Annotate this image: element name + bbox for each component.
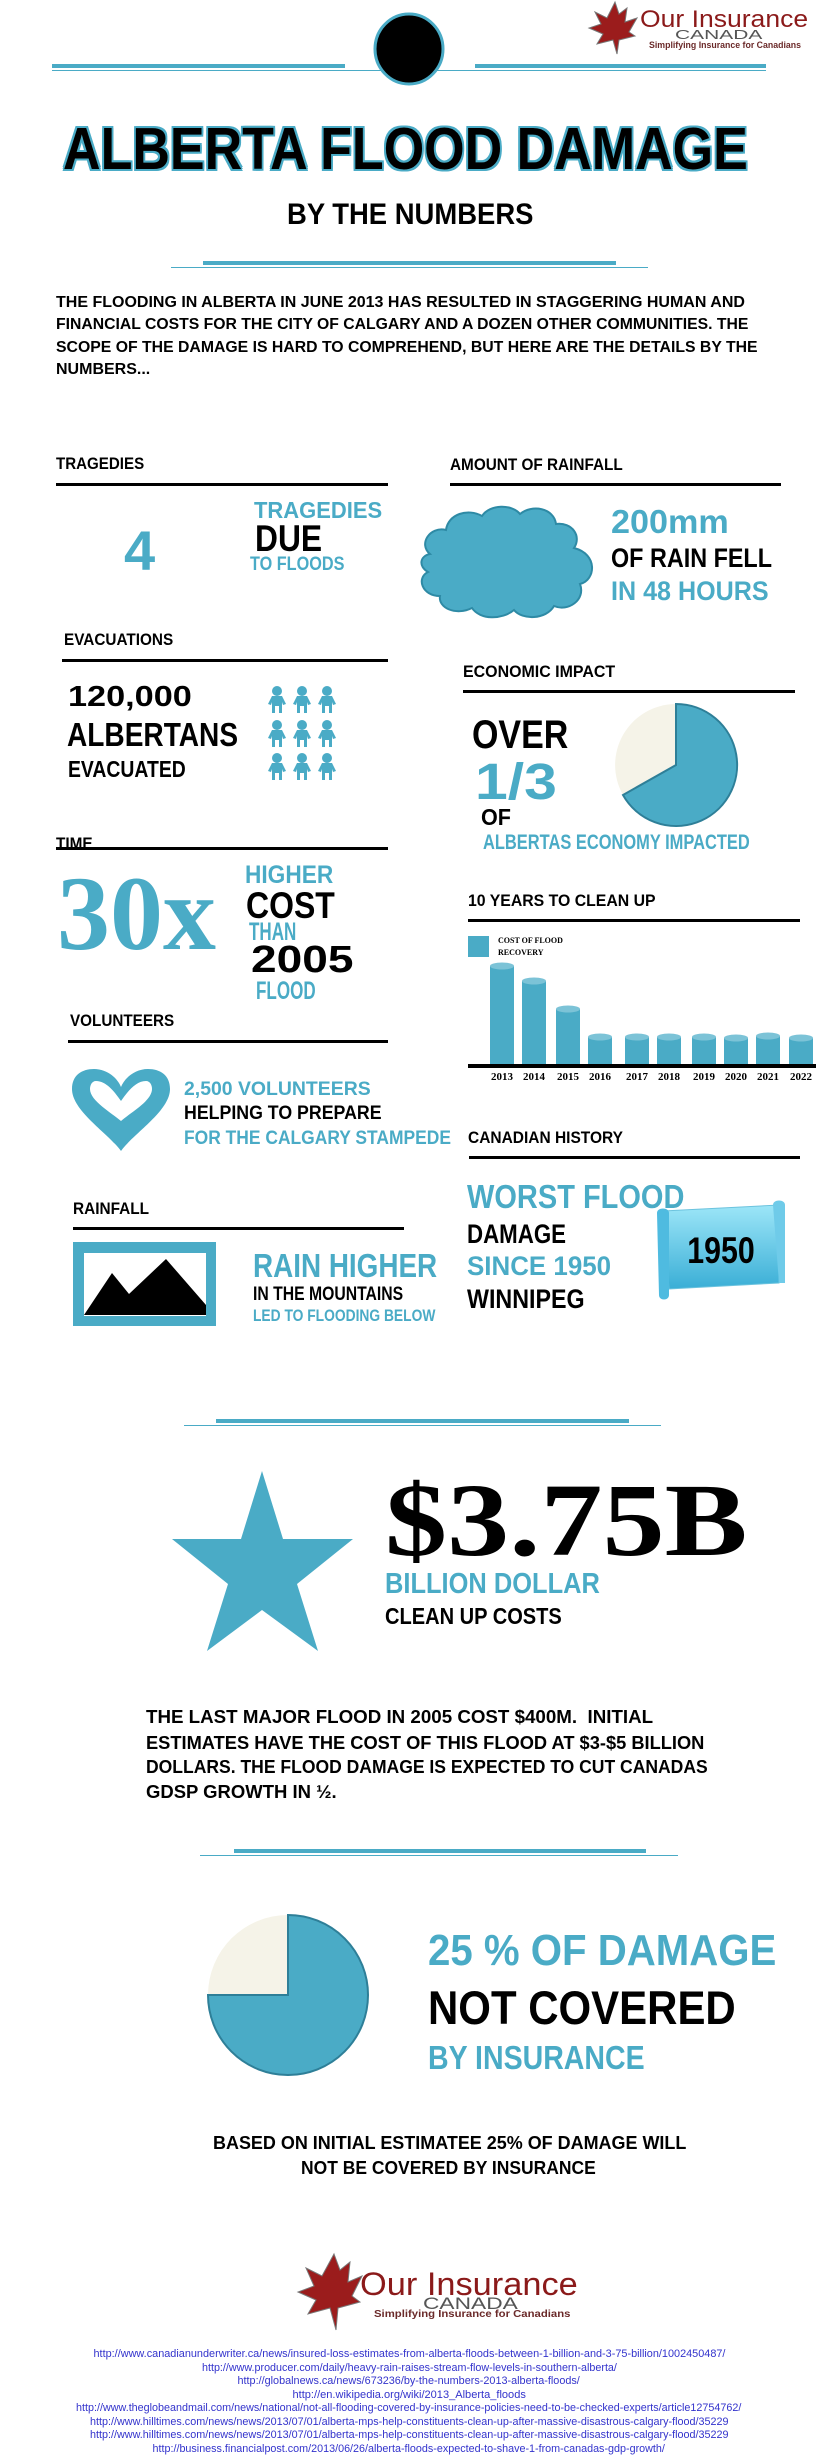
panel: not covered: 25 % OF DAMAGE [428, 1926, 776, 1975]
text block: cost detail [146, 1707, 708, 1802]
sources list: http://www.producer.com/daily/heavy-rain-raises-stream-flow-levels-in-southern-alberta/ [202, 2362, 616, 2374]
sources list: http://www.canadianunderwriter.ca/news/insured-loss-estimates-from-alberta-floods-between-1-billion-and-3-75-billion/1002450487/ [93, 2348, 725, 2360]
text block: cost detail: DOLLARS. THE FLOOD DAMAGE IS EXPECTED TO CUT CANADAS [146, 1757, 708, 1777]
panel: time [56, 834, 388, 1005]
logo top [588, 0, 808, 54]
pie chart: economy [615, 703, 738, 827]
panel: rainfall: RAINFALL [73, 1199, 149, 1218]
panel: rainfall: RAIN HIGHER [253, 1247, 437, 1284]
header divider [52, 64, 766, 71]
text block: estimate note: NOT BE COVERED BY INSURANCE [301, 2158, 596, 2178]
panel: tragedies: DUE [255, 518, 322, 559]
panel: amount of rainfall: IN 48 HOURS [611, 576, 769, 606]
panel: cleanup cost: CLEAN UP COSTS [385, 1603, 562, 1629]
bar chart: RECOVERY [498, 948, 544, 957]
panel: time: HIGHER [245, 861, 333, 889]
panel: canadian history: WINNIPEG [467, 1284, 585, 1314]
panel: economic impact: ECONOMIC IMPACT [463, 662, 615, 681]
panel: cleanup cost [172, 1463, 747, 1651]
text block: cost detail: THE LAST MAJOR FLOOD IN 2005 COST $400M. INITIAL [146, 1707, 653, 1727]
logo bottom: CANADA [423, 2294, 518, 2313]
panel: 10 years to clean up [468, 891, 816, 1082]
panel: amount of rainfall [420, 455, 781, 618]
intro text: FINANCIAL COSTS FOR THE CITY OF CALGARY AND A DOZEN OTHER COMMUNITIES. THE [56, 316, 748, 333]
text block: cost detail: ESTIMATES HAVE THE COST OF THIS FLOOD AT $3-$5 BILLION [146, 1733, 704, 1753]
panel: canadian history [467, 1128, 800, 1314]
panel: time: FLOOD [256, 977, 316, 1005]
panel: not covered [207, 1914, 776, 2076]
panel: tragedies: TRAGEDIES [56, 454, 144, 473]
icon: mountain picture [73, 1242, 216, 1326]
panel: evacuations: EVACUATIONS [64, 630, 173, 649]
logo top: Our Insurance [640, 6, 808, 33]
panel: volunteers: FOR THE CALGARY STAMPEDE [184, 1128, 451, 1149]
panel: volunteers: VOLUNTEERS [70, 1011, 174, 1030]
logo bottom [296, 2252, 578, 2330]
panel: evacuations [62, 630, 388, 782]
pie chart: insurance [207, 1914, 369, 2076]
sources list: http://en.wikipedia.org/wiki/2013_Alberta_floods [292, 2388, 526, 2400]
intro text: NUMBERS... [56, 361, 150, 378]
panel: amount of rainfall: OF RAIN FELL [611, 543, 772, 573]
logo top: Simplifying Insurance for Canadians [649, 40, 801, 50]
icon: black circle [374, 12, 444, 86]
title: ALBERTA FLOOD DAMAGE [63, 116, 748, 182]
panel: rainfall [73, 1199, 437, 1326]
panel: tragedies: 4 [124, 519, 155, 582]
panel: canadian history: WORST FLOOD [467, 1178, 684, 1215]
sources list: http://www.theglobeandmail.com/news/national/not-all-flooding-covered-by-insurance-policies-need-to-be-checked-experts/article12754762/ [76, 2402, 742, 2414]
text block: cost detail: GDSP GROWTH IN ½. [146, 1782, 337, 1802]
panel: economic impact: OVER [472, 713, 568, 757]
panel: economic impact: ALBERTAS ECONOMY IMPACTED [483, 831, 750, 854]
panel: volunteers [68, 1011, 451, 1151]
subtitle: BY THE NUMBERS [287, 198, 533, 231]
panel: time: COST [246, 885, 335, 926]
sources list: http://globalnews.ca/news/673236/by-the-numbers-2013-alberta-floods/ [238, 2375, 580, 2387]
icon: scroll 1950: 1950 [687, 1230, 755, 1272]
panel: evacuations: ALBERTANS [67, 716, 238, 753]
panel: rainfall: IN THE MOUNTAINS [253, 1284, 403, 1305]
panel: time: 30x [57, 855, 216, 972]
icon: cloud [420, 506, 594, 618]
panel: time: TIME [56, 834, 93, 853]
intro text: SCOPE OF THE DAMAGE IS HARD TO COMPREHEND, BUT HERE ARE THE DETAILS BY THE [56, 339, 758, 356]
logo bottom: Our Insurance [360, 2266, 578, 2302]
panel: canadian history: CANADIAN HISTORY [468, 1128, 623, 1147]
sources list: http://business.financialpost.com/2013/06/26/alberta-floods-expected-to-shave-1-from-canadas-gdp-growth/ [153, 2442, 665, 2454]
panel: canadian history: SINCE 1950 [467, 1251, 611, 1281]
text block: estimate note: BASED ON INITIAL ESTIMATEE 25% OF DAMAGE WILL [213, 2133, 686, 2153]
intro text [56, 294, 758, 378]
panel: amount of rainfall: AMOUNT OF RAINFALL [450, 455, 623, 474]
icon: star [172, 1471, 353, 1651]
panel: cleanup cost: $3.75B [385, 1463, 747, 1578]
panel: economic impact: OF [481, 804, 511, 830]
logo bottom: Simplifying Insurance for Canadians [374, 2309, 570, 2320]
panel: evacuations: 120,000 [68, 681, 192, 713]
sources list: http://www.hilltimes.com/news/news/2013/07/01/alberta-mps-help-constituents-clean-up-after-massive-disastrous-calgary-flood/35229 [90, 2416, 728, 2428]
panel: time: THAN [249, 918, 296, 946]
panel: not covered: BY INSURANCE [428, 2039, 645, 2076]
panel: not covered: NOT COVERED [428, 1981, 736, 2034]
icon: scroll 1950 [657, 1200, 785, 1300]
panel: time: 2005 [251, 939, 353, 981]
panel: volunteers: HELPING TO PREPARE [184, 1103, 382, 1124]
icon: people grid [268, 686, 336, 780]
panel: economic impact: 1/3 [475, 753, 557, 810]
panel: evacuations: EVACUATED [68, 756, 186, 782]
panel: tragedies [56, 454, 388, 582]
text block: estimate note [213, 2133, 686, 2178]
panel: tragedies: TO FLOODS [250, 554, 344, 575]
panel: tragedies: TRAGEDIES [254, 497, 382, 523]
panel: amount of rainfall: 200mm [611, 503, 729, 540]
sources list: http://www.hilltimes.com/news/news/2013/07/01/alberta-mps-help-constituents-clean-up-after-massive-disastrous-calgary-flood/35229 [90, 2429, 728, 2441]
panel: volunteers: 2,500 VOLUNTEERS [184, 1079, 371, 1100]
sources list [76, 2348, 742, 2454]
logo top: CANADA [675, 27, 762, 42]
icon: heart [72, 1069, 170, 1151]
panel: rainfall: LED TO FLOODING BELOW [253, 1306, 435, 1325]
intro text: THE FLOODING IN ALBERTA IN JUNE 2013 HAS RESULTED IN STAGGERING HUMAN AND [56, 294, 745, 311]
bar chart: COST OF FLOOD [498, 936, 563, 945]
panel: economic impact [463, 662, 795, 854]
panel: 10 years to clean up: 10 YEARS TO CLEAN UP [468, 891, 656, 910]
panel: canadian history: DAMAGE [467, 1219, 566, 1249]
panel: cleanup cost: BILLION DOLLAR [385, 1568, 600, 1600]
bar chart [468, 936, 816, 1082]
